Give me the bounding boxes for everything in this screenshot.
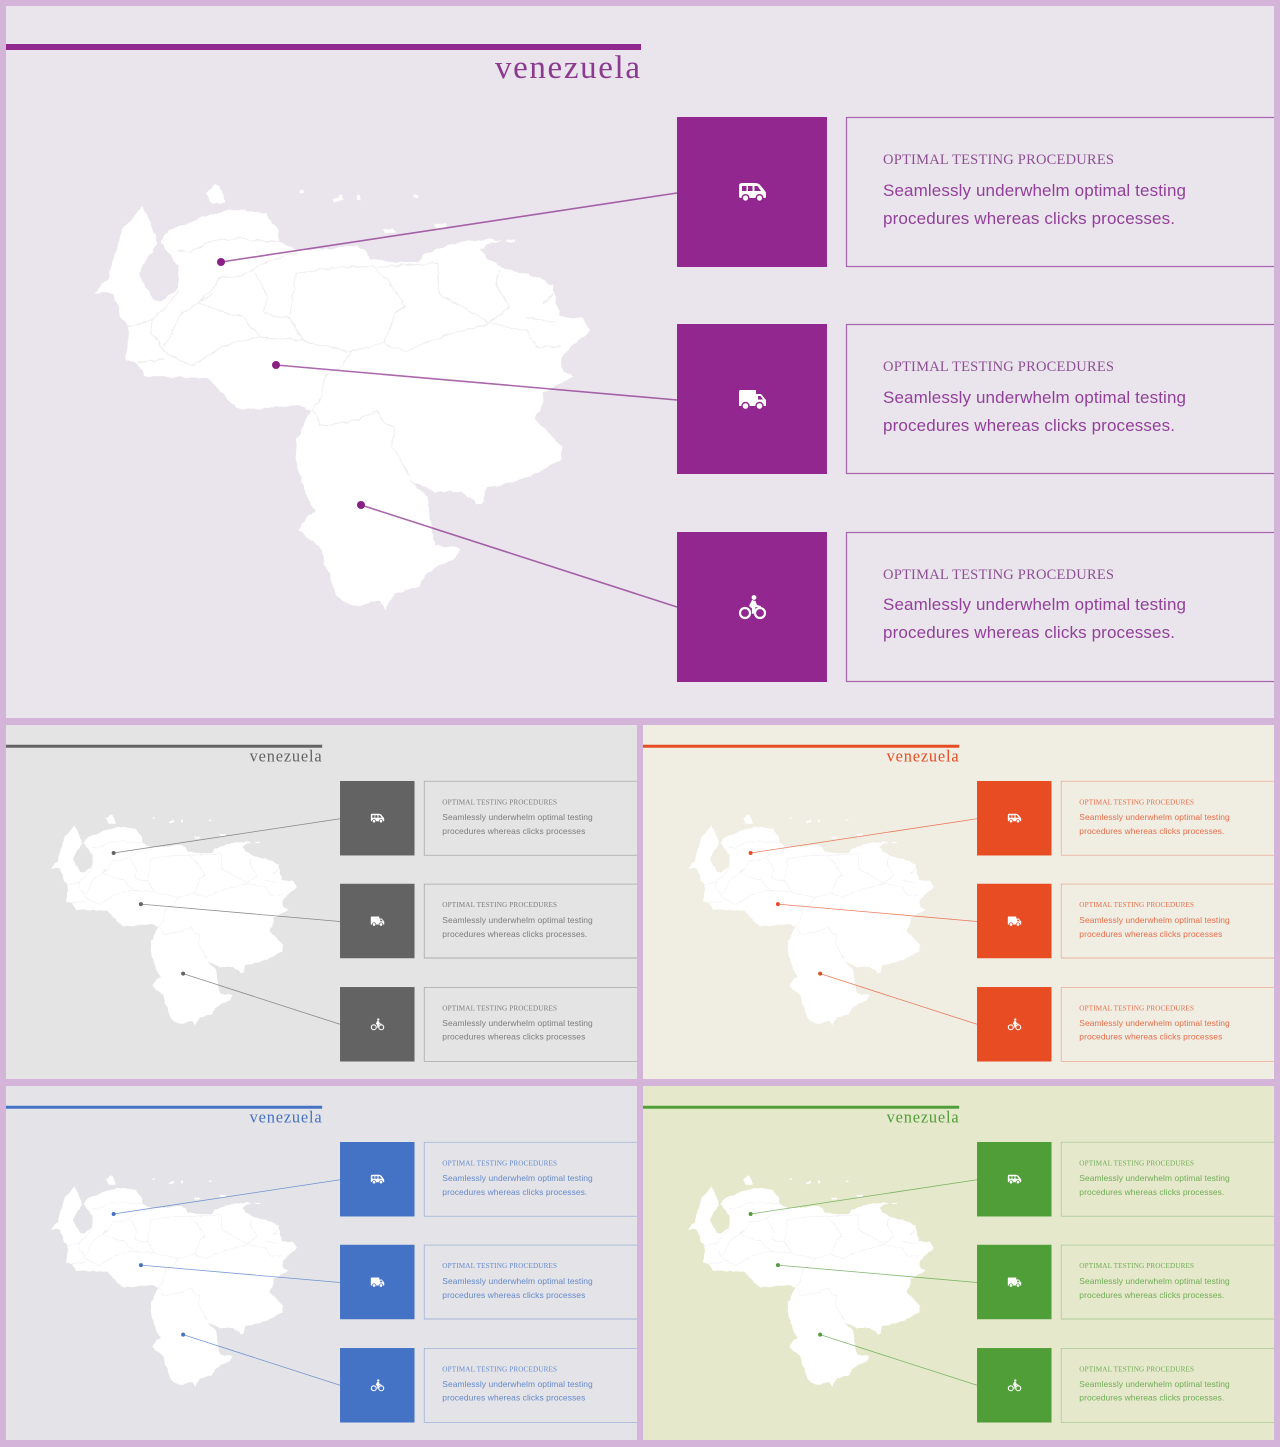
icon tiles [977,781,1052,1062]
text boxes: Seamlessly underwhelm optimal testing [1079,1018,1230,1028]
title bar [6,1106,322,1109]
title: venezuela [887,747,959,766]
map of Venezuela [687,814,934,1026]
map of Venezuela [50,814,297,1026]
title: venezuela [250,747,322,766]
text boxes: procedures whereas clicks processes. [1079,1187,1224,1197]
text box 2: Seamlessly underwhelm optimal testing [883,388,1186,407]
text box 1 [846,118,1274,266]
text boxes: Seamlessly underwhelm optimal testing [442,1173,593,1183]
text boxes: procedures whereas clicks processes [442,1032,585,1042]
text boxes: OPTIMAL TESTING PROCEDURES [442,1365,557,1373]
callout 2 connector [272,361,677,400]
panel: orange variant [643,725,1274,1079]
text boxes: OPTIMAL TESTING PROCEDURES [1079,901,1194,909]
text boxes: Seamlessly underwhelm optimal testing [442,915,593,925]
text boxes: procedures whereas clicks processes. [1079,1290,1224,1300]
text boxes [1061,781,1274,1061]
text boxes: procedures whereas clicks processes. [1079,826,1224,836]
text box 3: OPTIMAL TESTING PROCEDURES [883,567,1114,583]
text box 1: OPTIMAL TESTING PROCEDURES [883,152,1114,168]
text boxes: Seamlessly underwhelm optimal testing [442,812,593,822]
icon tiles [340,1142,415,1423]
callout 3 connector [357,501,677,607]
text boxes: OPTIMAL TESTING PROCEDURES [1079,1159,1194,1167]
text box 3: procedures whereas clicks processes. [883,623,1175,642]
text boxes: OPTIMAL TESTING PROCEDURES [1079,798,1194,806]
text boxes: OPTIMAL TESTING PROCEDURES [442,901,557,909]
panel: main purple [6,6,1274,718]
text boxes: Seamlessly underwhelm optimal testing [442,1379,593,1389]
connectors [749,1180,977,1385]
text boxes: OPTIMAL TESTING PROCEDURES [442,1004,557,1012]
map of Venezuela [94,184,590,610]
text boxes: Seamlessly underwhelm optimal testing [1079,1379,1230,1389]
text box 2: OPTIMAL TESTING PROCEDURES [883,359,1114,375]
text boxes: OPTIMAL TESTING PROCEDURES [442,1159,557,1167]
text boxes: OPTIMAL TESTING PROCEDURES [442,798,557,806]
title bar [643,745,959,748]
text boxes: Seamlessly underwhelm optimal testing [442,1276,593,1286]
gray variant content [6,745,637,1062]
connectors [112,1180,340,1385]
connectors [112,819,340,1024]
text boxes: procedures whereas clicks processes [1079,1032,1222,1042]
text boxes: procedures whereas clicks processes. [442,929,587,939]
green variant content [643,1106,1274,1423]
text boxes: procedures whereas clicks processes. [442,1187,587,1197]
icon tile: truck [677,324,827,474]
text box 3 [846,532,1274,682]
text box 2: procedures whereas clicks processes. [883,416,1175,435]
text boxes: Seamlessly underwhelm optimal testing [1079,1276,1230,1286]
icon tile: van [677,117,827,267]
orange variant content [643,745,1274,1062]
icon tiles [340,781,415,1062]
text boxes [424,781,637,1061]
text boxes: OPTIMAL TESTING PROCEDURES [1079,1262,1194,1270]
text boxes [1061,1142,1274,1422]
text boxes: procedures whereas clicks processes [442,1290,585,1300]
icon tiles [977,1142,1052,1423]
title: venezuela [250,1108,322,1127]
map of Venezuela [50,1175,297,1387]
text box 3: Seamlessly underwhelm optimal testing [883,595,1186,614]
callout 1 connector [217,193,677,266]
text boxes: procedures whereas clicks processes [442,1393,585,1403]
text boxes: procedures whereas clicks processes [442,826,585,836]
text boxes: Seamlessly underwhelm optimal testing [1079,812,1230,822]
text box 1: Seamlessly underwhelm optimal testing [883,181,1186,200]
text boxes [424,1142,637,1422]
text boxes: OPTIMAL TESTING PROCEDURES [442,1262,557,1270]
blue variant content [6,1106,637,1423]
panel: gray variant [6,725,637,1079]
connectors [749,819,977,1024]
title bar [6,745,322,748]
title: venezuela [887,1108,959,1127]
text boxes: OPTIMAL TESTING PROCEDURES [1079,1004,1194,1012]
text boxes: Seamlessly underwhelm optimal testing [442,1018,593,1028]
text boxes: Seamlessly underwhelm optimal testing [1079,915,1230,925]
title bar [643,1106,959,1109]
text box 1: procedures whereas clicks processes. [883,209,1175,228]
title bar [6,44,641,50]
text boxes: procedures whereas clicks processes. [1079,1393,1224,1403]
text box 2 [846,324,1274,474]
text boxes: OPTIMAL TESTING PROCEDURES [1079,1365,1194,1373]
panel: green variant [643,1086,1274,1440]
text boxes: Seamlessly underwhelm optimal testing [1079,1173,1230,1183]
title: venezuela [495,50,640,86]
panel: blue variant [6,1086,637,1440]
text boxes: procedures whereas clicks processes [1079,929,1222,939]
icon tile: bicycle [677,532,827,682]
map of Venezuela [687,1175,934,1387]
